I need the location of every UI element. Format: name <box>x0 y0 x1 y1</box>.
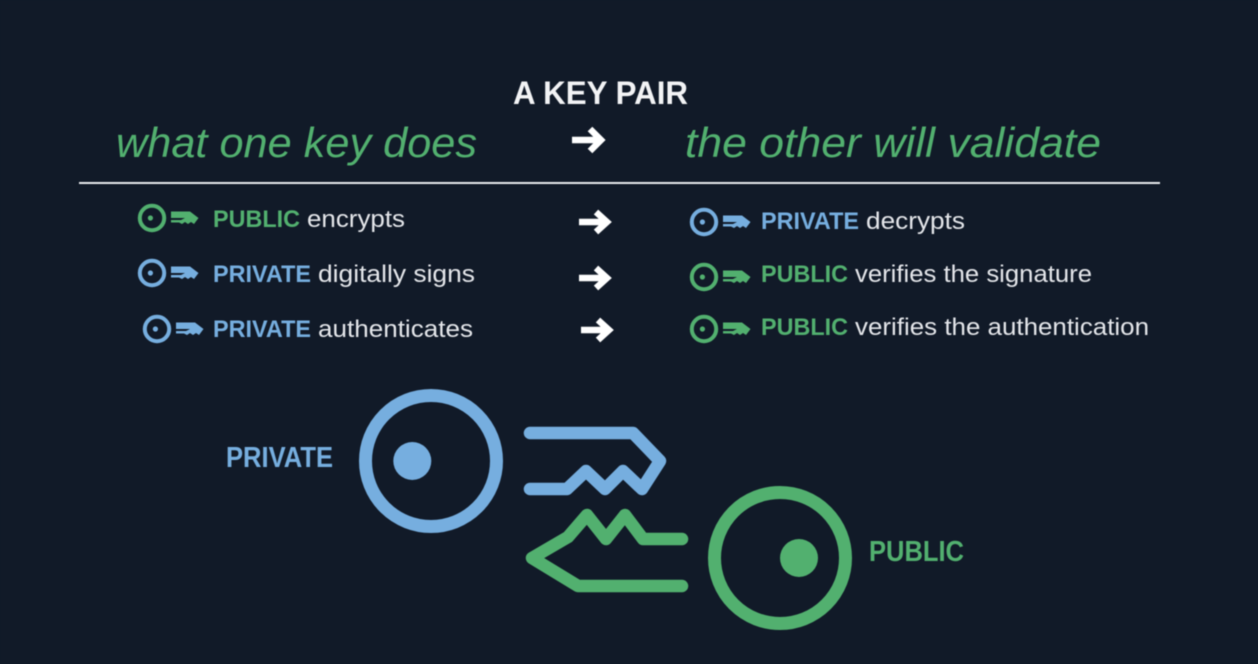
icon: public key small <box>692 317 750 341</box>
row 3 right: public verifies the authentication: verifies the authentication <box>855 314 1149 341</box>
row 1 right: private decrypts <box>692 208 965 235</box>
row 3 left: private authenticates: authenticates <box>318 316 473 343</box>
arrow: row 1 <box>579 212 607 232</box>
row 3 left: private authenticates: PRIVATE <box>213 316 311 343</box>
arrow: heading <box>572 129 601 151</box>
arrow: row 3 <box>581 320 609 340</box>
icon: public key small <box>692 265 750 289</box>
title: a key pair: A KEY PAIR <box>513 75 688 111</box>
row 1 left: public encrypts <box>140 206 405 233</box>
icon: public key small <box>140 206 198 230</box>
row 2 left: private digitally signs <box>140 261 475 288</box>
icon: private key small <box>140 261 198 285</box>
row 3 right: public verifies the authentication <box>692 314 1149 341</box>
row 1 right: private decrypts: PRIVATE <box>761 208 859 235</box>
icon: large public key <box>532 492 846 624</box>
arrow: row 2 <box>579 268 607 288</box>
heading: the other will validate: the other will validate <box>685 119 1101 166</box>
row 2 right: public verifies the signature <box>692 261 1092 289</box>
row 2 right: public verifies the signature: PUBLIC <box>761 261 848 288</box>
icon: large private key <box>366 396 660 526</box>
row 1 right: private decrypts: decrypts <box>866 208 965 235</box>
row 3 right: public verifies the authentication: PUBLIC <box>761 314 848 341</box>
row 2 left: private digitally signs: digitally signs <box>318 261 475 288</box>
icon: private key small <box>692 210 750 234</box>
row 1 left: public encrypts: encrypts <box>307 206 405 233</box>
row 3 left: private authenticates <box>145 316 473 343</box>
heading: what one key does: what one key does <box>116 119 477 166</box>
label: private: PRIVATE <box>226 442 333 474</box>
row 2 right: public verifies the signature: verifies the signature <box>855 261 1092 288</box>
icon: private key small <box>145 317 204 341</box>
row 2 left: private digitally signs: PRIVATE <box>213 261 311 288</box>
row 1 left: public encrypts: PUBLIC <box>213 206 300 233</box>
label: public: PUBLIC <box>869 536 964 568</box>
